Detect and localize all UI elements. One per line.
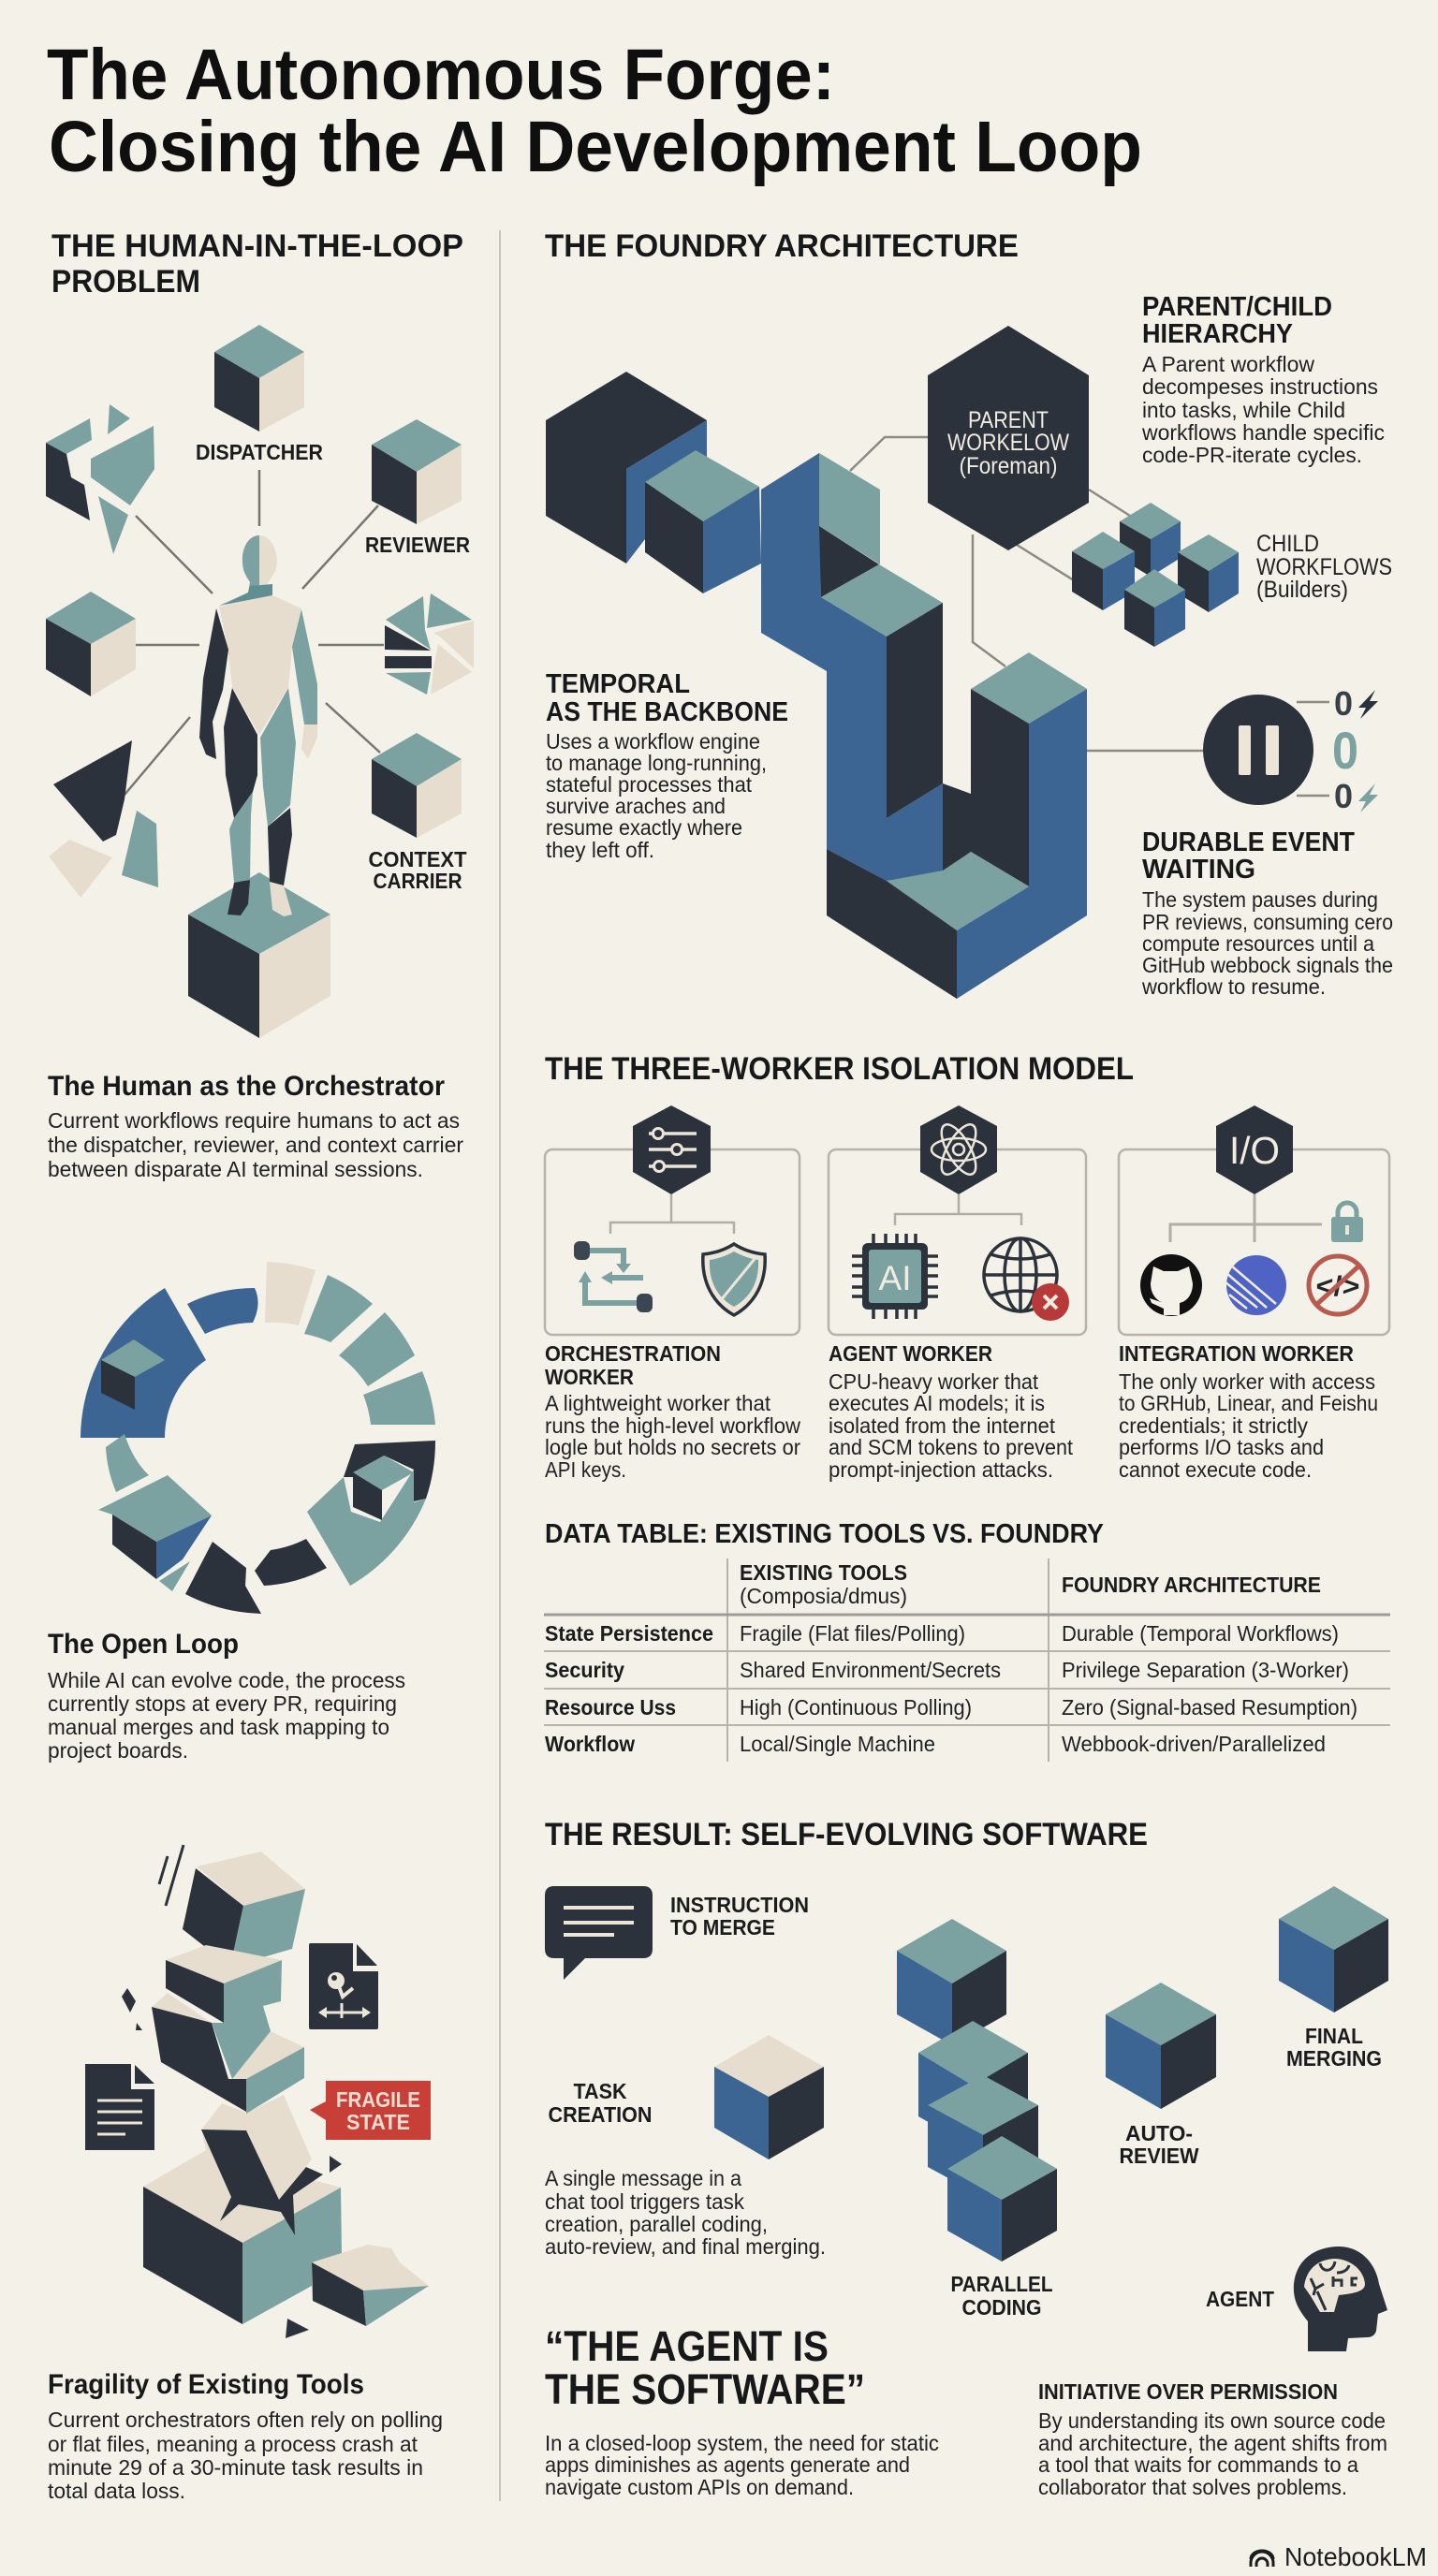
row: security: Shared Environment/Secrets [740,1658,1001,1682]
label: parallel coding: PARALLEL [951,2272,1052,2296]
text: parent/child hierarchy: workflows handle specific [1141,420,1385,445]
text: orchestration worker: logle but holds no secrets or [545,1435,800,1459]
text: agent worker [829,1341,1074,1482]
text: durable event waiting: compute resources until a [1142,931,1374,956]
hexagon: parent workflow: (Foreman) [959,453,1058,479]
diagram: temporal backbone isometric pipeline [546,372,1087,999]
text: the human as the orchestrator [48,1071,463,1181]
text: durable event waiting [1141,827,1393,999]
row: security: Privilege Separation (3-Worker) [1062,1658,1349,1682]
icon: Linear logo [1225,1255,1286,1315]
panel: foundry architecture [545,228,1393,999]
icon: chat bubble [545,1886,653,1980]
table header: FOUNDRY ARCHITECTURE [1062,1573,1321,1597]
label: instruction to merge [670,1893,809,1939]
text: temporal as the backbone: AS THE BACKBONE [546,697,788,727]
text: durable event waiting: WAITING [1142,855,1255,885]
label: task creation: CREATION [549,2102,652,2127]
text: integration worker: performs I/O tasks and [1119,1435,1324,1459]
text: fragility of existing tools: Fragility of Existing Tools [48,2369,364,2400]
label: child workflows: (Builders) [1256,577,1348,603]
cube: task creation [714,2035,824,2159]
connector lines from human to roles [125,470,384,795]
cube: shattered upper left [46,404,154,554]
icon: I/O hexagon [1216,1105,1293,1194]
hexagon: parent workflow: PARENT [968,407,1049,433]
text: temporal as the backbone: stateful processes that [546,772,753,797]
cube: auto-review [1106,1983,1216,2109]
text: parent/child hierarchy: decompeses instructions [1142,374,1378,399]
text: integration worker [1119,1341,1378,1482]
label: parallel coding [951,2272,1052,2320]
heading: human-in-the-loop: PROBLEM [51,264,200,300]
callout: fragile state: STATE [346,2110,410,2134]
text: single message: chat tool triggers task [545,2189,744,2214]
text: the open loop: project boards. [48,1738,188,1763]
text: closed-loop system: In a closed-loop system, the need for static [545,2431,939,2455]
icon: blocked globe [984,1238,1069,1321]
label: auto-review: REVIEW [1120,2144,1199,2168]
text: agent worker: executes AI models; it is [829,1391,1045,1415]
zero resource indicators: 0 [1334,777,1353,815]
cube: shattered lower left [49,740,158,898]
text: temporal as the backbone: TEMPORAL [546,669,690,699]
icon: flat file document [85,2064,154,2150]
text: durable event waiting: GitHub webbock signals the [1142,953,1393,977]
callout: fragile state: FRAGILE [336,2087,420,2112]
zero resource indicators [1297,684,1378,815]
callout: fragile state [310,2081,431,2140]
heading: human-in-the-loop: THE HUMAN-IN-THE-LOOP [51,228,463,264]
text: temporal as the backbone: they left off. [546,838,654,862]
label: child workflows: CHILD [1256,531,1319,557]
text: the open loop: While AI can evolve code, the process [48,1668,405,1692]
icon: atom hexagon [920,1105,997,1194]
text: temporal as the backbone: survive araches and [546,794,726,818]
row: workflow: Local/Single Machine [740,1732,935,1756]
heading: the result: THE RESULT: SELF-EVOLVING SOFTWARE [545,1817,1148,1852]
label: final merging [1286,2024,1382,2071]
text: agent worker: AGENT WORKER [829,1341,992,1366]
text: fragility of existing tools: Current orchestrators often rely on polling [48,2408,443,2432]
panel: the result [545,1817,1388,2499]
text: orchestration worker: WORKER [545,1365,634,1389]
text: integration worker: credentials; it strictly [1119,1413,1308,1438]
label: child workflows [1256,531,1392,603]
title [47,35,1142,187]
text: the human as the orchestrator: The Human as the Orchestrator [48,1071,445,1102]
icon: pause button [1203,695,1313,805]
label: context carrier [369,847,466,893]
quote: the agent is the software: “THE AGENT IS [545,2322,829,2370]
icon: no code execution: </> [1316,1271,1359,1302]
text: the open loop: The Open Loop [48,1629,239,1660]
label: final merging: MERGING [1286,2046,1382,2071]
text: initiative over permission: and architecture, the agent shifts from [1038,2431,1387,2455]
icon: GitHub logo [1140,1254,1202,1316]
text: agent worker: CPU-heavy worker that [829,1369,1039,1394]
zero resource indicators: 0 [1334,684,1353,723]
icon: workflow arrows [574,1241,653,1312]
text: initiative over permission: By understanding its own source code [1038,2408,1386,2433]
text: fragility of existing tools: minute 29 of a 30-minute task results in [48,2455,423,2480]
row: workflow [545,1732,1326,1756]
text: integration worker: cannot execute code. [1119,1457,1312,1482]
icon: agent head with brain [1294,2247,1387,2351]
text: initiative over permission: a tool that waits for commands to a [1038,2452,1358,2477]
icon: padlock [1331,1203,1363,1242]
text: orchestration worker: runs the high-level workflow [545,1413,800,1438]
row: state persistence: Fragile (Flat files/Polling) [740,1621,965,1646]
text: durable event waiting: PR reviews, consuming cero [1142,910,1393,934]
label: task creation: TASK [573,2079,627,2103]
heading: three-worker isolation model: THE THREE-WORKER ISOLATION MODEL [545,1051,1134,1087]
text: integration worker: to GRHub, Linear, and Feishu [1119,1391,1378,1415]
label: dispatcher: DISPATCHER [196,440,323,464]
cube: shattered right [385,593,474,695]
heading: data table: DATA TABLE: EXISTING TOOLS VS. FOUNDRY [545,1519,1104,1549]
cube: left [46,592,136,696]
label: reviewer: REVIEWER [365,533,470,557]
text: agent worker: isolated from the internet [829,1413,1056,1438]
text: temporal as the backbone: Uses a workflow engine [546,729,760,754]
hexagon: parent workflow: WORKELOW [947,430,1069,456]
label: instruction to merge: INSTRUCTION [670,1893,809,1917]
text: parent/child hierarchy: A Parent workflow [1142,352,1314,376]
text: durable event waiting: workflow to resume. [1141,974,1326,999]
heading: human-in-the-loop [51,228,463,300]
text: parent/child hierarchy: into tasks, while Child [1142,398,1345,422]
text: initiative over permission: INITIATIVE OVER PERMISSION [1038,2379,1338,2404]
illustration: crumbling block stack [122,1845,429,2338]
child workflow cubes [1072,503,1239,647]
panel: three-worker isolation model [545,1051,1389,1482]
heading: foundry architecture: THE FOUNDRY ARCHITECTURE [545,228,1019,264]
text: closed-loop system [545,2431,939,2499]
text: fragility of existing tools: total data loss. [48,2479,185,2503]
icon: key document [309,1943,378,2029]
text: the open loop: manual merges and task mapping to [48,1715,389,1739]
panel: human-in-the-loop problem [46,228,474,2503]
row: state persistence: State Persistence [545,1621,713,1646]
text: single message [545,2166,826,2259]
text: orchestration worker: ORCHESTRATION [545,1341,721,1366]
text: single message: auto-review, and final merging. [545,2234,826,2259]
text: orchestration worker [545,1341,800,1482]
text: temporal as the backbone: to manage long-running, [546,751,767,775]
text: single message: creation, parallel coding, [545,2212,768,2236]
text: orchestration worker: API keys. [545,1457,626,1482]
row: resource use: Resource Uss [545,1695,676,1720]
cube: reviewer [372,419,462,524]
text: the human as the orchestrator: the dispatcher, reviewer, and context carrier [48,1133,463,1157]
row: security: Security [545,1658,624,1682]
text: the open loop [48,1629,405,1763]
title: The Autonomous Forge: [47,35,835,115]
logo: NotebookLM: NotebookLM [1284,2542,1427,2571]
row: state persistence [545,1621,1339,1646]
hexagon: parent workflow [928,326,1089,550]
row: resource use [545,1695,1357,1720]
icon: sliders hexagon [633,1105,711,1194]
text: integration worker: The only worker with access [1119,1369,1375,1394]
row: workflow: Webbook-driven/Parallelized [1062,1732,1326,1756]
label: context carrier: CONTEXT [369,847,466,871]
chart: broken loop ring [81,1262,435,1614]
text: agent worker: and SCM tokens to prevent [829,1435,1074,1459]
text: the human as the orchestrator: Current workflows require humans to act as [48,1108,460,1133]
text: parent/child hierarchy [1141,292,1385,467]
card: orchestration worker [545,1105,800,1482]
label: final merging: FINAL [1305,2024,1363,2048]
text: initiative over permission: collaborator that solves problems. [1038,2475,1347,2499]
label: child workflows: WORKFLOWS [1256,554,1392,580]
text: temporal as the backbone: resume exactly where [546,815,742,840]
row: security [545,1658,1349,1682]
text: agent worker: prompt-injection attacks. [829,1457,1053,1482]
row: resource use: Zero (Signal-based Resumption) [1062,1695,1357,1720]
card: agent worker [829,1105,1086,1482]
icon: I/O hexagon: I/O [1229,1129,1280,1172]
icon: AI chip: AI [879,1259,911,1297]
label: auto-review [1120,2121,1199,2168]
label: auto-review: AUTO- [1125,2121,1193,2145]
text: fragility of existing tools [48,2369,443,2503]
table header: EXISTING TOOLS [740,1560,907,1585]
text: durable event waiting: DURABLE EVENT [1142,827,1355,857]
icon: no code execution [1309,1256,1367,1314]
text: initiative over permission [1038,2379,1387,2499]
icon: AI chip [852,1234,938,1319]
text: orchestration worker: A lightweight worker that [545,1391,771,1415]
cube: dispatcher [214,325,304,432]
text: the open loop: currently stops at every PR, requiring [48,1691,397,1716]
cube: final merging [1279,1886,1388,2012]
row: workflow: Workflow [545,1732,635,1756]
text: parent/child hierarchy: HIERARCHY [1142,319,1293,349]
text: parent/child hierarchy: code-PR-iterate cycles. [1142,443,1362,467]
text: integration worker: INTEGRATION WORKER [1119,1341,1354,1366]
quote: the agent is the software: THE SOFTWARE” [545,2365,865,2413]
connector lines [850,437,1204,751]
table header [740,1560,1321,1608]
quote: the agent is the software [545,2322,865,2413]
label: parallel coding: CODING [962,2295,1041,2320]
text: parent/child hierarchy: PARENT/CHILD [1142,292,1332,322]
panel: data table [544,1519,1390,1762]
human figure [199,535,317,916]
text: temporal as the backbone [546,669,788,862]
text: the human as the orchestrator: between disparate AI terminal sessions. [48,1157,423,1181]
cubes: parallel coding stack [897,1919,1057,2261]
card: integration worker [1119,1105,1389,1482]
row: state persistence: Durable (Temporal Workflows) [1062,1621,1339,1646]
text: single message: A single message in a [545,2166,741,2190]
text: fragility of existing tools: or flat files, meaning a process crash at [48,2432,418,2456]
cube: context carrier [372,733,462,838]
pedestal cube [188,872,330,1038]
zero resource indicators: 0 [1332,721,1358,780]
label: task creation [549,2079,652,2127]
text: closed-loop system: apps diminishes as agents generate and [545,2452,910,2477]
text: durable event waiting: The system pauses during [1142,887,1378,912]
text: closed-loop system: navigate custom APIs on demand. [545,2475,854,2499]
title: Closing the AI Development Loop [49,107,1142,187]
label: agent: AGENT [1206,2287,1274,2311]
label: instruction to merge: TO MERGE [670,1915,775,1939]
label: context carrier: CARRIER [373,869,462,893]
icon: shield [703,1244,765,1315]
row: resource use: High (Continuous Polling) [740,1695,972,1720]
table header: (Composia/dmus) [740,1584,907,1608]
